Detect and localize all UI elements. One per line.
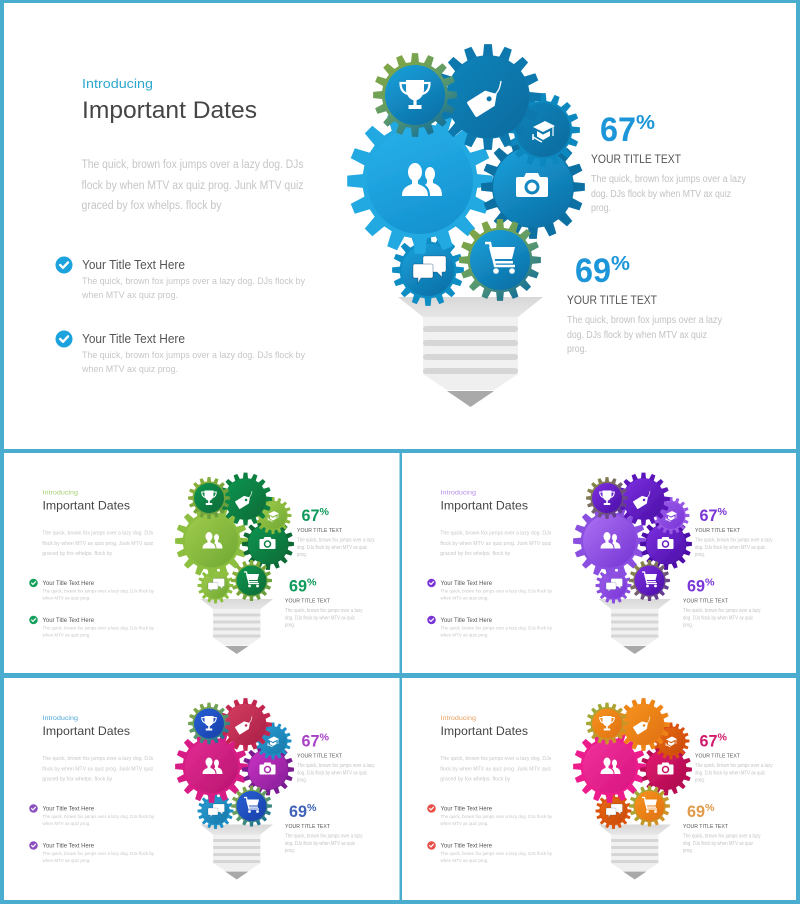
panel: magenta and blue slide: [4, 678, 400, 900]
stat text block 2: [285, 824, 363, 854]
list item 2: when MTV ax quiz prog.: [440, 632, 488, 638]
stat: 67%: 67: [600, 111, 636, 149]
list item 2: Your Title Text Here: [440, 842, 492, 850]
panel: purple slide: [402, 453, 796, 673]
list item 2: [427, 616, 553, 638]
gear: chat: [392, 234, 464, 306]
gear: price tag: [219, 473, 272, 525]
stat text block 1: [695, 528, 773, 558]
list item 1: The quick, brown fox jumps over a lazy dog. DJs flock by: [42, 814, 155, 820]
gear: people: [175, 730, 248, 803]
gear: trophy: [373, 53, 457, 137]
list item 2: [56, 330, 305, 375]
gear: people: [573, 505, 646, 577]
eyebrow: Introducing: Introducing: [440, 490, 476, 496]
intro paragraph: [440, 530, 551, 557]
gear: cart: [231, 786, 272, 826]
stat text block 2: The quick, brown fox jumps over a lazy: [285, 608, 363, 614]
stat: 67%: 67: [700, 732, 718, 750]
list item 1: when MTV ax quiz prog.: [42, 596, 90, 602]
eyebrow: Introducing: Introducing: [82, 76, 153, 91]
gear: price tag: [435, 44, 541, 150]
list item 1: when MTV ax quiz prog.: [81, 290, 178, 301]
stat: 67%: [600, 111, 655, 149]
list item 2: Your Title Text Here: [42, 842, 94, 850]
eyebrow: Introducing: Introducing: [42, 715, 78, 722]
stat text block 2: YOUR TITLE TEXT: [285, 598, 330, 604]
stat text block 1: dog. DJs flock by when MTV ax quiz: [297, 545, 367, 551]
eyebrow: Introducing: Introducing: [440, 715, 476, 722]
stat text block 1: The quick, brown fox jumps over a lazy: [695, 763, 773, 769]
stat: 69%: 69: [687, 802, 705, 821]
stat text block 1: prog.: [297, 778, 307, 784]
list item 1: [29, 579, 155, 602]
list item 2: when MTV ax quiz prog.: [42, 632, 90, 638]
intro paragraph: The quick, brown fox jumps over a lazy dog. DJs: [42, 530, 153, 536]
stat: 69%: [687, 576, 715, 596]
list item 2: when MTV ax quiz prog.: [81, 364, 178, 375]
list item 2: [29, 841, 155, 864]
list item 1: [427, 804, 553, 827]
stat: 69%: %: [705, 803, 715, 814]
gear: trophy: [188, 703, 230, 744]
list item 1: Your Title Text Here: [440, 580, 492, 587]
stat text block 2: [567, 295, 722, 355]
intro paragraph: The quick, brown fox jumps over a lazy dog. DJs: [82, 159, 304, 171]
bulb base: [598, 599, 671, 654]
gear: chat: [596, 568, 631, 603]
list item 2: The quick, brown fox jumps over a lazy dog. DJs flock by: [42, 626, 155, 632]
stat text block 1: The quick, brown fox jumps over a lazy: [591, 174, 746, 185]
stat: 69%: [289, 576, 317, 596]
stat text block 2: prog.: [285, 848, 295, 854]
stat text block 2: [683, 598, 761, 628]
gear: trophy: [188, 477, 230, 519]
intro paragraph: graced by fox whelps. flock by: [440, 776, 510, 782]
stat text block 2: YOUR TITLE TEXT: [683, 598, 728, 604]
stat text block 2: dog. DJs flock by when MTV ax quiz: [285, 841, 355, 847]
gear: cart: [231, 560, 272, 601]
stat text block 1: dog. DJs flock by when MTV ax quiz: [297, 770, 367, 776]
stat text block 1: dog. DJs flock by when MTV ax quiz: [591, 189, 731, 200]
list item 2: The quick, brown fox jumps over a lazy dog. DJs flock by: [440, 851, 553, 857]
bulb base: [598, 824, 671, 880]
gear: price tag: [219, 698, 272, 751]
stat: 67%: %: [718, 507, 727, 518]
stat text block 2: [285, 598, 363, 628]
stat: 67%: [700, 732, 727, 750]
list item 2: The quick, brown fox jumps over a lazy dog. DJs flock by: [42, 851, 155, 857]
intro paragraph: flock by when MTV ax quiz prog. Junk MTV quiz: [42, 766, 153, 772]
stat: 69%: 69: [575, 252, 611, 290]
stat: 69%: 69: [289, 802, 307, 821]
stat: 69%: 69: [289, 576, 307, 596]
list item 2: when MTV ax quiz prog.: [440, 858, 488, 864]
stat text block 1: dog. DJs flock by when MTV ax quiz: [695, 545, 765, 551]
stat text block 1: [297, 528, 375, 558]
stat: 69%: 69: [687, 576, 705, 596]
stat text block 2: The quick, brown fox jumps over a lazy: [683, 834, 761, 840]
stat text block 2: dog. DJs flock by when MTV ax quiz: [683, 616, 753, 622]
stat: 69%: [289, 802, 317, 821]
stat text block 2: prog.: [683, 848, 693, 854]
stat text block 1: dog. DJs flock by when MTV ax quiz: [695, 770, 765, 776]
intro paragraph: [82, 159, 304, 212]
stat: 69%: [687, 802, 715, 821]
stat text block 1: prog.: [297, 552, 307, 558]
gear: price tag: [617, 473, 670, 525]
intro paragraph: flock by when MTV ax quiz prog. Junk MTV quiz: [82, 180, 304, 192]
panel: green slide: [4, 453, 400, 673]
intro paragraph: graced by fox whelps. flock by: [42, 551, 112, 557]
gear: graduation cap: [653, 723, 689, 759]
stat text block 2: prog.: [683, 622, 693, 628]
heading: Important Dates: Important Dates: [440, 724, 528, 738]
list item 2: [427, 841, 553, 864]
stat text block 2: The quick, brown fox jumps over a lazy: [567, 315, 722, 326]
intro paragraph: The quick, brown fox jumps over a lazy dog. DJs: [440, 530, 551, 536]
stat text block 1: The quick, brown fox jumps over a lazy: [695, 538, 773, 544]
gear: trophy: [586, 477, 628, 519]
intro paragraph: graced by fox whelps. flock by: [440, 551, 510, 557]
list item 1: when MTV ax quiz prog.: [42, 821, 90, 827]
stat: 69%: [575, 252, 630, 290]
gear: camera: [481, 135, 585, 239]
list item 1: Your Title Text Here: [42, 806, 94, 812]
list item 1: Your Title Text Here: [82, 258, 185, 272]
list item 1: Your Title Text Here: [42, 580, 94, 587]
gear: cart: [459, 219, 541, 301]
bulb base: [200, 824, 273, 880]
gear: graduation cap: [255, 497, 291, 534]
gear: chat: [198, 568, 233, 603]
stat text block 1: The quick, brown fox jumps over a lazy: [297, 538, 375, 544]
stat text block 2: [683, 824, 761, 854]
bulb base: [200, 599, 273, 654]
gear: trophy: [586, 703, 628, 744]
stat text block 1: [695, 754, 773, 784]
intro paragraph: graced by fox whelps. flock by: [42, 776, 112, 782]
intro paragraph: flock by when MTV ax quiz prog. Junk MTV quiz: [440, 541, 551, 547]
stat: 67%: 67: [302, 732, 320, 750]
list item 2: Your Title Text Here: [82, 332, 185, 346]
panel: pink and orange slide: [402, 678, 796, 900]
intro paragraph: flock by when MTV ax quiz prog. Junk MTV quiz: [440, 766, 551, 772]
heading: Important Dates: Important Dates: [440, 498, 528, 512]
stat: 67%: %: [718, 732, 727, 744]
stat text block 2: dog. DJs flock by when MTV ax quiz: [683, 841, 753, 847]
stat text block 2: YOUR TITLE TEXT: [567, 295, 657, 307]
stat text block 1: [297, 754, 375, 784]
stat: 67%: %: [320, 732, 329, 744]
stat text block 1: prog.: [695, 778, 705, 784]
list item 2: when MTV ax quiz prog.: [42, 858, 90, 864]
list item 1: when MTV ax quiz prog.: [440, 596, 488, 602]
list item 2: The quick, brown fox jumps over a lazy dog. DJs flock by: [440, 626, 553, 632]
stat text block 1: YOUR TITLE TEXT: [297, 754, 342, 760]
list item 2: The quick, brown fox jumps over a lazy dog. DJs flock by: [82, 350, 305, 361]
list item 2: [29, 616, 155, 638]
stat text block 2: prog.: [285, 622, 295, 628]
stat: 67%: %: [320, 507, 329, 518]
gear: chat: [198, 793, 233, 829]
list item 1: The quick, brown fox jumps over a lazy dog. DJs flock by: [42, 588, 155, 594]
stat: 67%: 67: [700, 506, 718, 525]
stat text block 1: YOUR TITLE TEXT: [297, 528, 342, 534]
gear: camera: [640, 518, 692, 570]
gear: people: [573, 730, 646, 803]
list item 1: when MTV ax quiz prog.: [440, 821, 488, 827]
stat text block 2: prog.: [567, 344, 587, 355]
stat text block 2: YOUR TITLE TEXT: [285, 824, 330, 830]
stat text block 2: dog. DJs flock by when MTV ax quiz: [567, 330, 707, 341]
list item 1: The quick, brown fox jumps over a lazy dog. DJs flock by: [82, 276, 305, 287]
list item 1: The quick, brown fox jumps over a lazy dog. DJs flock by: [440, 588, 553, 594]
stat text block 1: YOUR TITLE TEXT: [695, 754, 740, 760]
gear: graduation cap: [506, 93, 580, 167]
panel: main blue slide: [4, 3, 796, 449]
gear: camera: [640, 744, 692, 795]
gear: cart: [629, 786, 670, 826]
stat text block 1: The quick, brown fox jumps over a lazy: [297, 763, 375, 769]
gear: graduation cap: [255, 723, 291, 759]
heading: Important Dates: Important Dates: [42, 498, 130, 512]
gear: camera: [242, 518, 294, 570]
intro paragraph: The quick, brown fox jumps over a lazy dog. DJs: [42, 756, 153, 762]
stat text block 1: prog.: [591, 203, 611, 214]
stat: 67%: %: [636, 112, 655, 134]
gear: people: [175, 505, 248, 577]
intro paragraph: [42, 530, 153, 557]
stat: 67%: 67: [302, 506, 320, 525]
intro paragraph: [42, 756, 153, 782]
stat: 67%: [302, 506, 329, 525]
stat: 69%: %: [307, 803, 317, 814]
list item 2: Your Title Text Here: [440, 617, 492, 624]
gear: people: [347, 108, 493, 254]
stat: 67%: [700, 506, 727, 525]
stat text block 2: The quick, brown fox jumps over a lazy: [285, 834, 363, 840]
stat text block 2: dog. DJs flock by when MTV ax quiz: [285, 616, 355, 622]
stat text block 1: prog.: [695, 552, 705, 558]
stat: 67%: [302, 732, 329, 750]
stat: 69%: %: [705, 578, 715, 588]
list item 1: [56, 256, 305, 301]
bulb base: [398, 297, 543, 407]
gear: camera: [242, 744, 294, 795]
gear: chat: [596, 793, 631, 829]
list item 1: Your Title Text Here: [440, 806, 492, 812]
stat: 69%: %: [307, 578, 317, 588]
gear: cart: [629, 560, 670, 601]
list item 1: The quick, brown fox jumps over a lazy dog. DJs flock by: [440, 814, 553, 820]
list item 1: [29, 804, 155, 827]
gear: graduation cap: [653, 497, 689, 534]
stat text block 1: [591, 154, 746, 214]
intro paragraph: graced by fox whelps. flock by: [82, 200, 222, 212]
intro paragraph: [440, 756, 551, 782]
intro paragraph: flock by when MTV ax quiz prog. Junk MTV quiz: [42, 541, 153, 547]
stat text block 1: YOUR TITLE TEXT: [591, 154, 681, 166]
stat text block 2: The quick, brown fox jumps over a lazy: [683, 608, 761, 614]
list item 2: Your Title Text Here: [42, 617, 94, 624]
stat text block 1: YOUR TITLE TEXT: [695, 528, 740, 534]
intro paragraph: The quick, brown fox jumps over a lazy dog. DJs: [440, 756, 551, 762]
heading: Important Dates: Important Dates: [42, 724, 130, 738]
eyebrow: Introducing: Introducing: [42, 490, 78, 496]
list item 1: [427, 579, 553, 602]
gear: price tag: [617, 698, 670, 751]
heading: Important Dates: Important Dates: [82, 97, 257, 124]
stat: 69%: %: [611, 253, 630, 275]
stat text block 2: YOUR TITLE TEXT: [683, 824, 728, 830]
